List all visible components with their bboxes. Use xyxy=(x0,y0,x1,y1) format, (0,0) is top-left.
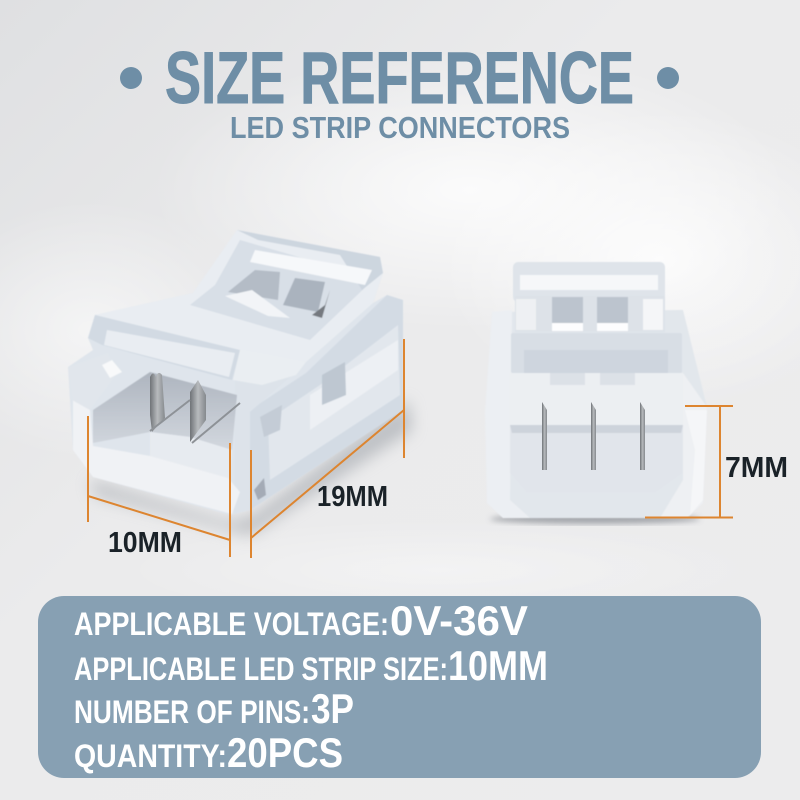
left connector pins xyxy=(150,373,240,443)
dimension lines 19mm xyxy=(251,339,404,558)
front lever xyxy=(511,333,682,373)
right connector photo xyxy=(485,262,707,524)
label 7mm: 7MM xyxy=(725,452,788,484)
spec line: voltage: APPLICABLE VOLTAGE: xyxy=(74,606,389,642)
spec line: strip size: APPLICABLE LED STRIP SIZE: xyxy=(74,651,448,687)
right connector pins xyxy=(542,402,645,470)
shadow under right connector xyxy=(490,514,700,524)
title xyxy=(120,38,679,119)
dimension lines 7mm xyxy=(645,406,733,518)
spec line: quantity: 20PCS xyxy=(227,729,343,776)
spec line: voltage xyxy=(74,597,528,644)
panel background xyxy=(38,596,761,778)
rear lever xyxy=(237,230,383,290)
front cavity xyxy=(93,372,237,450)
spec line: quantity: QUANTITY: xyxy=(74,738,227,774)
spec line: pins: 3P xyxy=(311,685,354,732)
panel: specifications xyxy=(38,596,761,778)
side face xyxy=(250,295,403,510)
label 10mm: 10MM xyxy=(108,527,182,559)
dimension lines 10mm xyxy=(88,416,230,557)
front lever xyxy=(88,315,240,380)
front lower lip xyxy=(73,400,240,514)
subtitle: LED STRIP CONNECTORS xyxy=(230,111,570,145)
title right bullet xyxy=(657,67,679,89)
cavity xyxy=(510,373,683,493)
dimension: 19mm xyxy=(251,339,404,558)
rear lever xyxy=(513,262,665,302)
dimension: 10mm xyxy=(88,416,230,559)
left connector photo xyxy=(68,230,412,535)
spec line: pins: NUMBER OF PINS: xyxy=(74,694,310,730)
right connector body xyxy=(485,262,707,518)
spec line: strip size: 10MM xyxy=(448,642,548,689)
title text: SIZE REFERENCE xyxy=(165,38,634,119)
left connector body xyxy=(68,230,403,515)
dimension: 7mm xyxy=(645,406,788,518)
label 19mm: 19MM xyxy=(317,481,388,513)
shadow under left connector xyxy=(90,400,412,535)
top surface xyxy=(95,230,383,362)
spec line: quantity xyxy=(74,729,343,776)
spec line: voltage: 0V-36V xyxy=(390,597,528,644)
title left bullet xyxy=(120,67,142,89)
